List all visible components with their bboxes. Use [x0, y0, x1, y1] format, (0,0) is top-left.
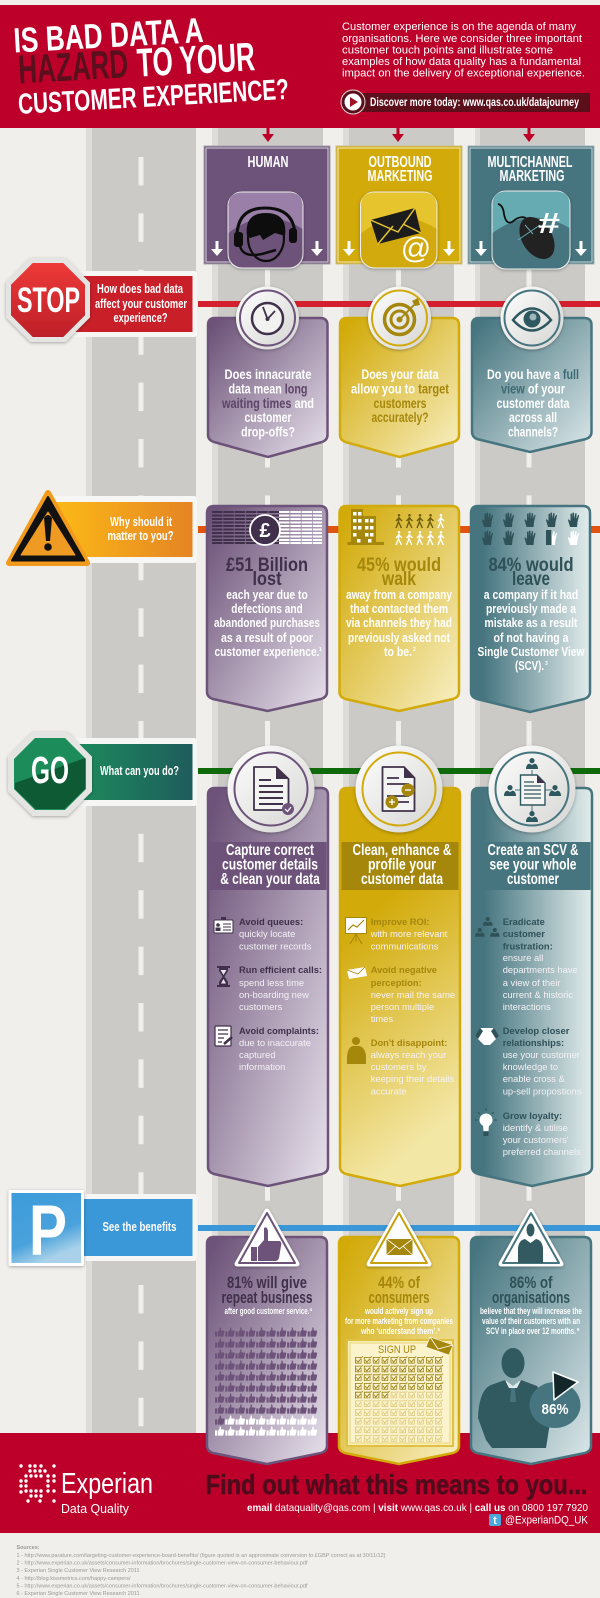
icon: envelope [426, 1337, 453, 1355]
icon: document check [228, 746, 314, 832]
card: outbound marketing: MARKETING [368, 168, 432, 185]
heading band: see your whole [490, 856, 577, 874]
panel: organisations: 86% of [510, 1273, 553, 1292]
why label: Why should it [110, 515, 173, 529]
text: avoid queues: Avoid queues: [239, 916, 303, 927]
chart: money bars: £ [259, 520, 271, 542]
heading band: Clean, enhance & [352, 842, 452, 859]
why label: matter to you? [108, 529, 174, 543]
heading band [210, 842, 326, 890]
text: run efficient calls: customers [239, 1001, 283, 1012]
heading band [474, 842, 590, 890]
icon: presentation chart [346, 918, 366, 944]
card: multichannel marketing [468, 146, 594, 269]
text: improve roi [370, 916, 448, 952]
sources: 2 - http://www.experian.co.uk/assets/consumer-information/brochures/single-customer-view-on-consumer-behaviour.pdf [16, 1560, 308, 1566]
panel: marketing stat: previously asked not [348, 631, 451, 645]
panel: human question: Does innacurate [224, 367, 312, 382]
icon: hands [482, 512, 579, 545]
card: outbound marketing [336, 146, 462, 268]
icon: stop sign: STOP [17, 281, 80, 320]
text: avoid complaints: Avoid complaints: [239, 1025, 319, 1036]
icon: eye [500, 286, 564, 350]
title: CUSTOMER EXPERIENCE? [17, 74, 290, 121]
sources: Sources: [16, 1545, 40, 1551]
title: TO YOUR [136, 35, 256, 86]
text: improve roi: Improve ROI: [371, 916, 430, 927]
text: avoid queues: quickly locate [239, 928, 295, 939]
icon: clock [236, 286, 299, 350]
icon: document plus minus [356, 746, 442, 832]
panel: human stat: abandoned purchases [214, 616, 320, 630]
text: avoid negative perception: person multiple [371, 1001, 434, 1012]
icon: handshake [475, 1028, 499, 1045]
text: grow loyalty: your customers' [503, 1134, 569, 1145]
icon: parking sign [8, 1190, 84, 1271]
icon: hazard triangle [9, 493, 87, 563]
panel: multichannel question: customer data [496, 396, 570, 411]
stop label: affect your customer [95, 297, 187, 311]
text: don't disappoint [371, 1037, 454, 1096]
card: human [204, 146, 330, 268]
title [13, 6, 290, 121]
icon: person [347, 1037, 366, 1064]
intro text: Customer experience is on the agenda of many [342, 21, 576, 33]
panel: multichannel stat: of not having a [494, 631, 569, 645]
panel: multichannel stat: 3 [545, 661, 548, 667]
sources: 4 - http://blog.kissmetrics.com/happy-campers/ [16, 1576, 131, 1582]
text: avoid queues [239, 916, 312, 952]
panel: human stat: each year due to [226, 588, 308, 602]
text: grow loyalty: preferred channels [503, 1146, 581, 1157]
panel: human stat: £51 Billion [226, 555, 308, 576]
panel: marketing question: allow you to target [351, 382, 449, 396]
text: avoid negative perception: Avoid negative [371, 964, 437, 975]
chart: 86 percent pie [530, 1372, 580, 1428]
sign up form: SIGN UP [378, 1344, 416, 1356]
text: don't disappoint: Don't disappoint: [371, 1037, 447, 1048]
panel: multichannel stat: previously made a [486, 602, 577, 616]
panel: marketing stat: 45% would [357, 555, 441, 576]
card: human: HUMAN [248, 154, 288, 171]
panel: sign up: 5 [438, 1327, 440, 1332]
arrows from header [262, 128, 535, 142]
stop label [70, 271, 197, 337]
intro text: impact on the delivery of exceptional experience. [342, 68, 585, 80]
text: develop closer relationships: use your customer [503, 1049, 580, 1060]
text: don't disappoint: always reach your [371, 1049, 446, 1060]
text: run efficient calls: Run efficient calls: [239, 964, 322, 975]
text: grow loyalty [503, 1110, 581, 1157]
sources [16, 1545, 386, 1597]
card: outbound marketing: OUTBOUND [368, 154, 432, 171]
text: develop closer relationships: knowledge to [503, 1061, 558, 1072]
panel: multichannel stat: leave [512, 569, 550, 590]
panel: repeat business: after good customer service. [224, 1306, 310, 1316]
icon: team [475, 917, 500, 937]
text: run efficient calls: on-boarding new [239, 989, 309, 1000]
go label [70, 738, 197, 806]
text: improve roi: with more relevant [370, 928, 448, 939]
panel: human stat [207, 506, 327, 711]
icon: stop sign [6, 258, 90, 342]
sources: 5 - http://www.experian.co.uk/assets/consumer-information/brochures/single-customer-view-on-consumer-behaviour.pdf [16, 1584, 308, 1590]
panel: marketing stat: away from a company [346, 588, 452, 602]
text: avoid queues: customer records [239, 940, 312, 952]
icon: id card [214, 917, 233, 933]
icon: light bulb [475, 1108, 497, 1136]
icon: parking sign: P [29, 1192, 67, 1271]
intro text: examples of how data quality has a fundamental [342, 56, 581, 68]
panel: human stat: 1 [319, 647, 322, 653]
text: eradicate frustration: interactions [503, 1001, 551, 1012]
icon: checklist [215, 1026, 232, 1046]
icon: mouse and hash: # [538, 208, 560, 240]
heading band: customer details [222, 856, 318, 874]
title: IS BAD DATA A [13, 11, 204, 61]
panel: sign up: consumers [368, 1288, 430, 1307]
text: develop closer relationships: up-sell propostions [503, 1086, 582, 1096]
text: eradicate frustration: a view of their [503, 977, 561, 988]
text: develop closer relationships: relationships: [503, 1037, 564, 1048]
footer banner [0, 1433, 600, 1533]
text: eradicate frustration: departments have [503, 964, 578, 975]
text: eradicate frustration: ensure all [503, 952, 543, 963]
pictogram: ticks [355, 1356, 443, 1442]
chart: 86 percent pie: 86% [542, 1401, 568, 1418]
text: develop closer relationships: Develop closer [503, 1025, 570, 1036]
panel: multichannel stat: (SCV). [515, 659, 544, 673]
stop label: How does bad data [97, 282, 184, 296]
panel: sign up [339, 1237, 459, 1464]
panel: human question [208, 318, 328, 457]
icon: envelope triangle [369, 1211, 429, 1264]
panel: marketing stat: 2 [413, 647, 416, 653]
icon: envelope and at sign: @ [401, 232, 431, 265]
panel: marketing stat: to be. [384, 645, 412, 659]
text: avoid negative perception: perception: [371, 977, 422, 988]
text: don't disappoint: customers by [371, 1061, 427, 1072]
panel: sign up: 44% of [378, 1273, 420, 1292]
panel: multichannel question [472, 318, 592, 452]
panel: marketing stat: walk [381, 569, 416, 590]
twitter: t [493, 1515, 497, 1527]
panel: human question: drop-offs? [241, 424, 295, 440]
sign up form [347, 1337, 453, 1446]
icon: business person [478, 1348, 552, 1448]
panel: multichannel stat: 84% would [488, 555, 574, 576]
panel: multichannel stat [471, 506, 590, 712]
panel: human question: data mean long [228, 382, 308, 396]
intro text [342, 21, 585, 80]
text: avoid negative perception [371, 964, 455, 1024]
heading band: customer [507, 871, 559, 888]
panel: organisations: 6 [577, 1327, 580, 1332]
panel: human question: waiting times and [221, 396, 314, 411]
discover more bar [341, 90, 590, 114]
icon: target [368, 286, 431, 350]
panel: sign up: for more marketing from companies [345, 1316, 453, 1326]
text: avoid complaints: captured [239, 1049, 275, 1060]
text: grow loyalty: Grow loyalty: [503, 1110, 562, 1121]
intro text: customer touch points and illustrate some [342, 44, 553, 56]
heading band: Capture correct [226, 842, 314, 859]
text: avoid negative perception: times [371, 1013, 393, 1024]
benefits label: See the benefits [102, 1220, 177, 1234]
text: run efficient calls: spend less time [239, 977, 304, 988]
title: HAZARD [17, 42, 129, 92]
text: improve roi: communications [371, 940, 439, 952]
sources: 6 - Experian Single Customer View Research 2011 [16, 1591, 140, 1597]
panel: marketing question: customers [374, 396, 426, 411]
text: avoid negative perception: never mail the same [371, 989, 455, 1000]
go label: What can you do? [100, 764, 179, 778]
panel: multichannel question: across all [509, 410, 557, 425]
panel: multichannel question: view of your [501, 382, 566, 396]
panel: multichannel question: Do you have a full [487, 367, 579, 382]
panel: marketing stat: that contacted them [350, 602, 448, 616]
panel: human stat: defections and [231, 602, 303, 616]
text: develop closer relationships: enable cross & [503, 1073, 565, 1084]
text: grow loyalty: identify & utilise [503, 1122, 568, 1133]
text: eradicate frustration [503, 916, 578, 1012]
sources: 1 - http://www.parature.com/targeting-customer-experience-board-benefits/ (figure quoted is an approximate conversion to £GBP correct as at 30/11/12) [16, 1553, 386, 1559]
panel: marketing question [340, 318, 459, 457]
chart: money bars [212, 512, 322, 545]
heading band: customer data [361, 871, 443, 888]
text: eradicate frustration: frustration: [503, 940, 553, 952]
card: multichannel marketing: MARKETING [500, 168, 564, 185]
icon: go sign: GO [31, 750, 69, 792]
text: avoid complaints [239, 1025, 319, 1072]
pictogram: thumbs [215, 1327, 317, 1436]
text: avoid complaints: information [239, 1061, 285, 1072]
stop label: experience? [114, 311, 168, 325]
experian logo [19, 1464, 153, 1516]
text: eradicate frustration: current & historic [503, 989, 573, 1000]
icon: headset agent [228, 192, 303, 268]
icon: document network [488, 746, 576, 832]
panel: capture data [208, 788, 328, 1186]
intro text: organisations. Here we consider three important [342, 33, 582, 45]
panel: repeat business [207, 1237, 327, 1464]
heading band: & clean your data [220, 871, 320, 888]
panel: human stat: lost [252, 569, 282, 590]
roads [86, 128, 585, 1433]
icon: office building [348, 509, 384, 545]
panel: marketing stat: via channels they had [346, 616, 452, 630]
text: eradicate frustration: Eradicate [503, 916, 545, 927]
text: don't disappoint: accurate [371, 1086, 407, 1096]
text: eradicate frustration: customer [503, 928, 545, 939]
panel: marketing question: Does your data [362, 367, 439, 382]
panel: organisations [471, 1237, 591, 1464]
panel: repeat business: 81% will give [227, 1273, 307, 1292]
contact details: email dataquality@qas.com | visit www.qas.co.uk | call us on 0800 197 7920 [247, 1502, 588, 1514]
panel: marketing question: accurately? [372, 410, 428, 425]
header banner [0, 5, 600, 128]
icon: envelopes [347, 967, 367, 979]
panel: marketing stat [340, 506, 459, 711]
panel: human stat: customer experience. [214, 645, 320, 659]
panel: human question: customer [244, 410, 292, 425]
panel: multichannel stat: a company if it had [484, 588, 578, 602]
text: don't disappoint: keeping their details [371, 1073, 454, 1084]
text: develop closer relationships [503, 1025, 582, 1096]
panel: multichannel question: channels? [508, 424, 558, 440]
panel: sign up: would actively sign up [364, 1306, 433, 1316]
text: avoid complaints: due to inaccurate [239, 1037, 311, 1048]
heading band [342, 842, 458, 890]
panel: repeat business: 4 [310, 1307, 312, 1312]
icon: walkers [396, 514, 444, 545]
panel: clean data [340, 788, 460, 1186]
panel: human stat: as a result of poor [221, 631, 313, 645]
panel: sign up: who ‘understand them’. [360, 1326, 437, 1336]
benefits label [70, 1194, 197, 1261]
panel: multichannel stat: mistake as a result [484, 616, 578, 630]
why label [52, 496, 197, 563]
icon: go sign [8, 732, 92, 816]
text: run efficient calls [239, 964, 322, 1012]
icon: person triangle [501, 1211, 561, 1264]
row lines [198, 301, 600, 1231]
panel: repeat business: repeat business [222, 1288, 312, 1307]
twitter: @ExperianDQ_UK [505, 1514, 589, 1526]
experian logo: Data Quality [61, 1501, 129, 1516]
heading band: profile your [368, 856, 436, 874]
icon: hourglass [217, 966, 230, 987]
experian logo: Experian [61, 1468, 153, 1500]
panel: single customer view [472, 788, 592, 1186]
sources: 3 - Experian Single Customer View Research 2011 [16, 1568, 140, 1574]
icon: thumbs up triangle [237, 1211, 297, 1264]
